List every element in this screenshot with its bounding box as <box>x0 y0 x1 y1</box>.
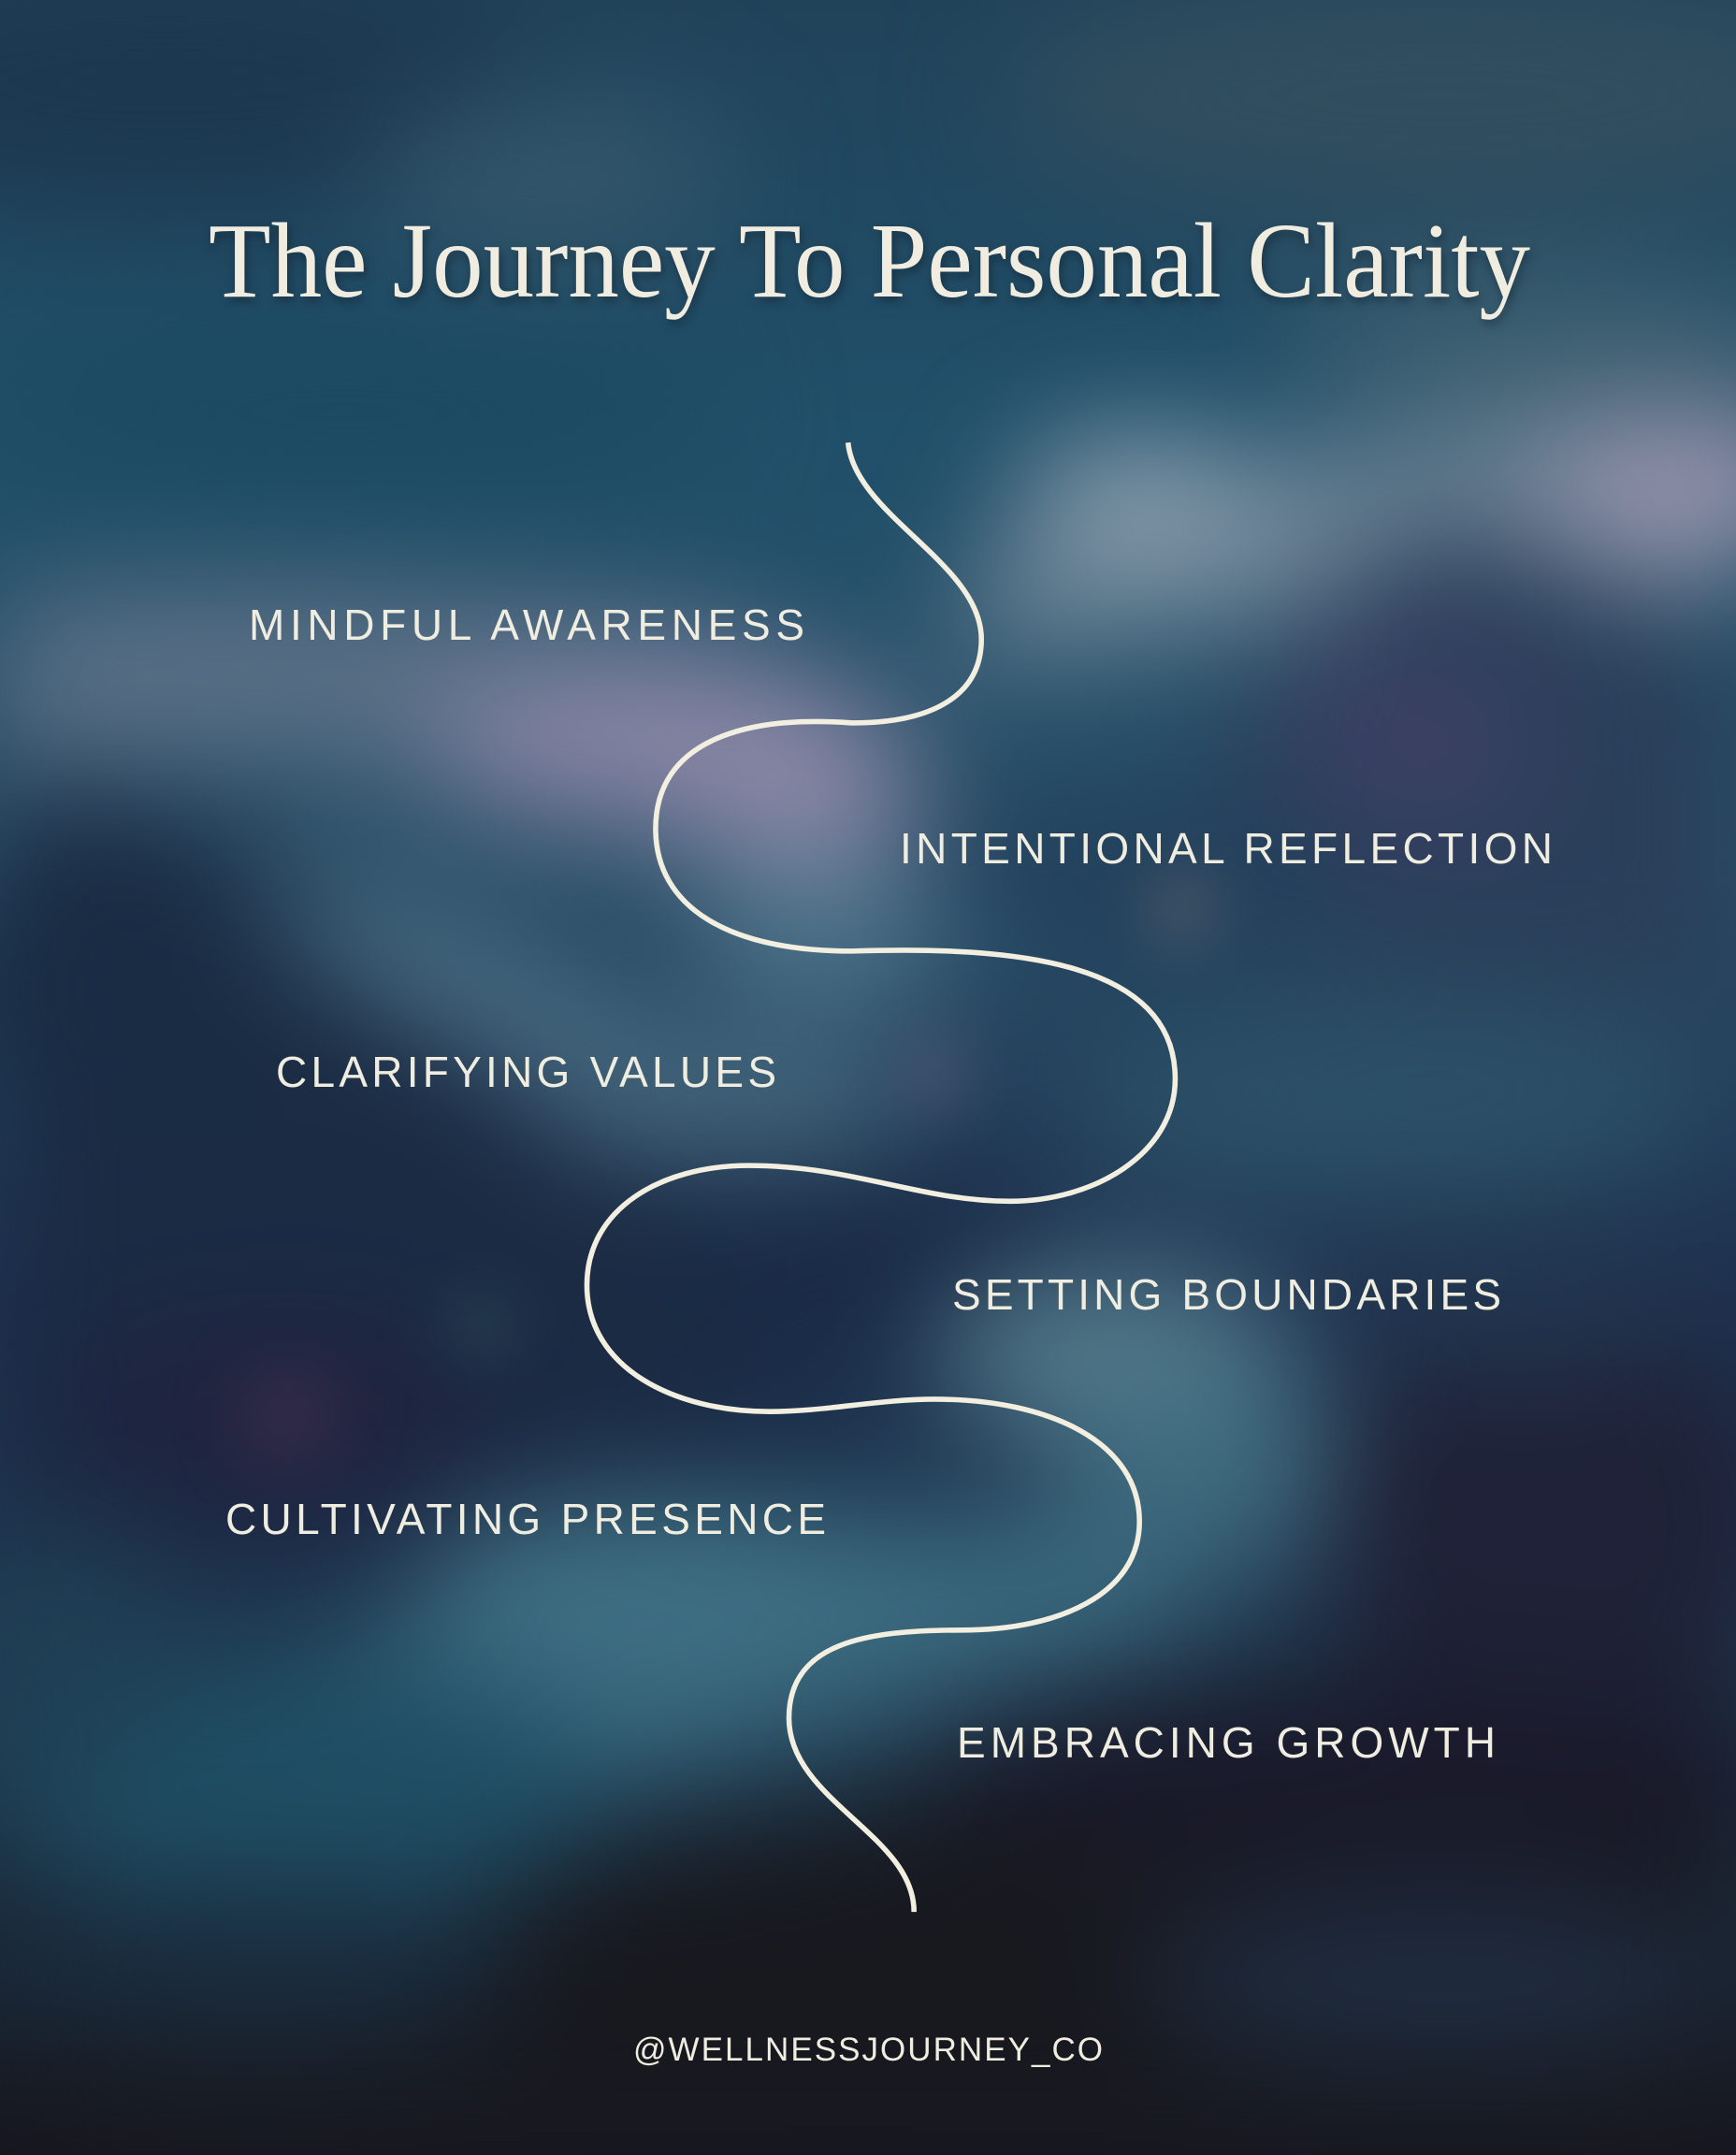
label: clarifying values: CLARIFYING VALUES <box>276 1048 776 1096</box>
label: mindful awareness: MINDFUL AWARENESS <box>249 600 804 649</box>
title: The Journey To Personal Clarity <box>209 201 1530 320</box>
label: embracing growth: EMBRACING GROWTH <box>957 1718 1496 1767</box>
winding path line <box>586 442 1175 1912</box>
label: setting boundaries: SETTING BOUNDARIES <box>952 1270 1501 1319</box>
social handle: @WELLNESSJOURNEY_CO <box>633 2032 1103 2068</box>
label: cultivating presence: CULTIVATING PRESENCE <box>225 1495 826 1543</box>
label: intentional reflection: INTENTIONAL REFLECTION <box>900 824 1553 873</box>
